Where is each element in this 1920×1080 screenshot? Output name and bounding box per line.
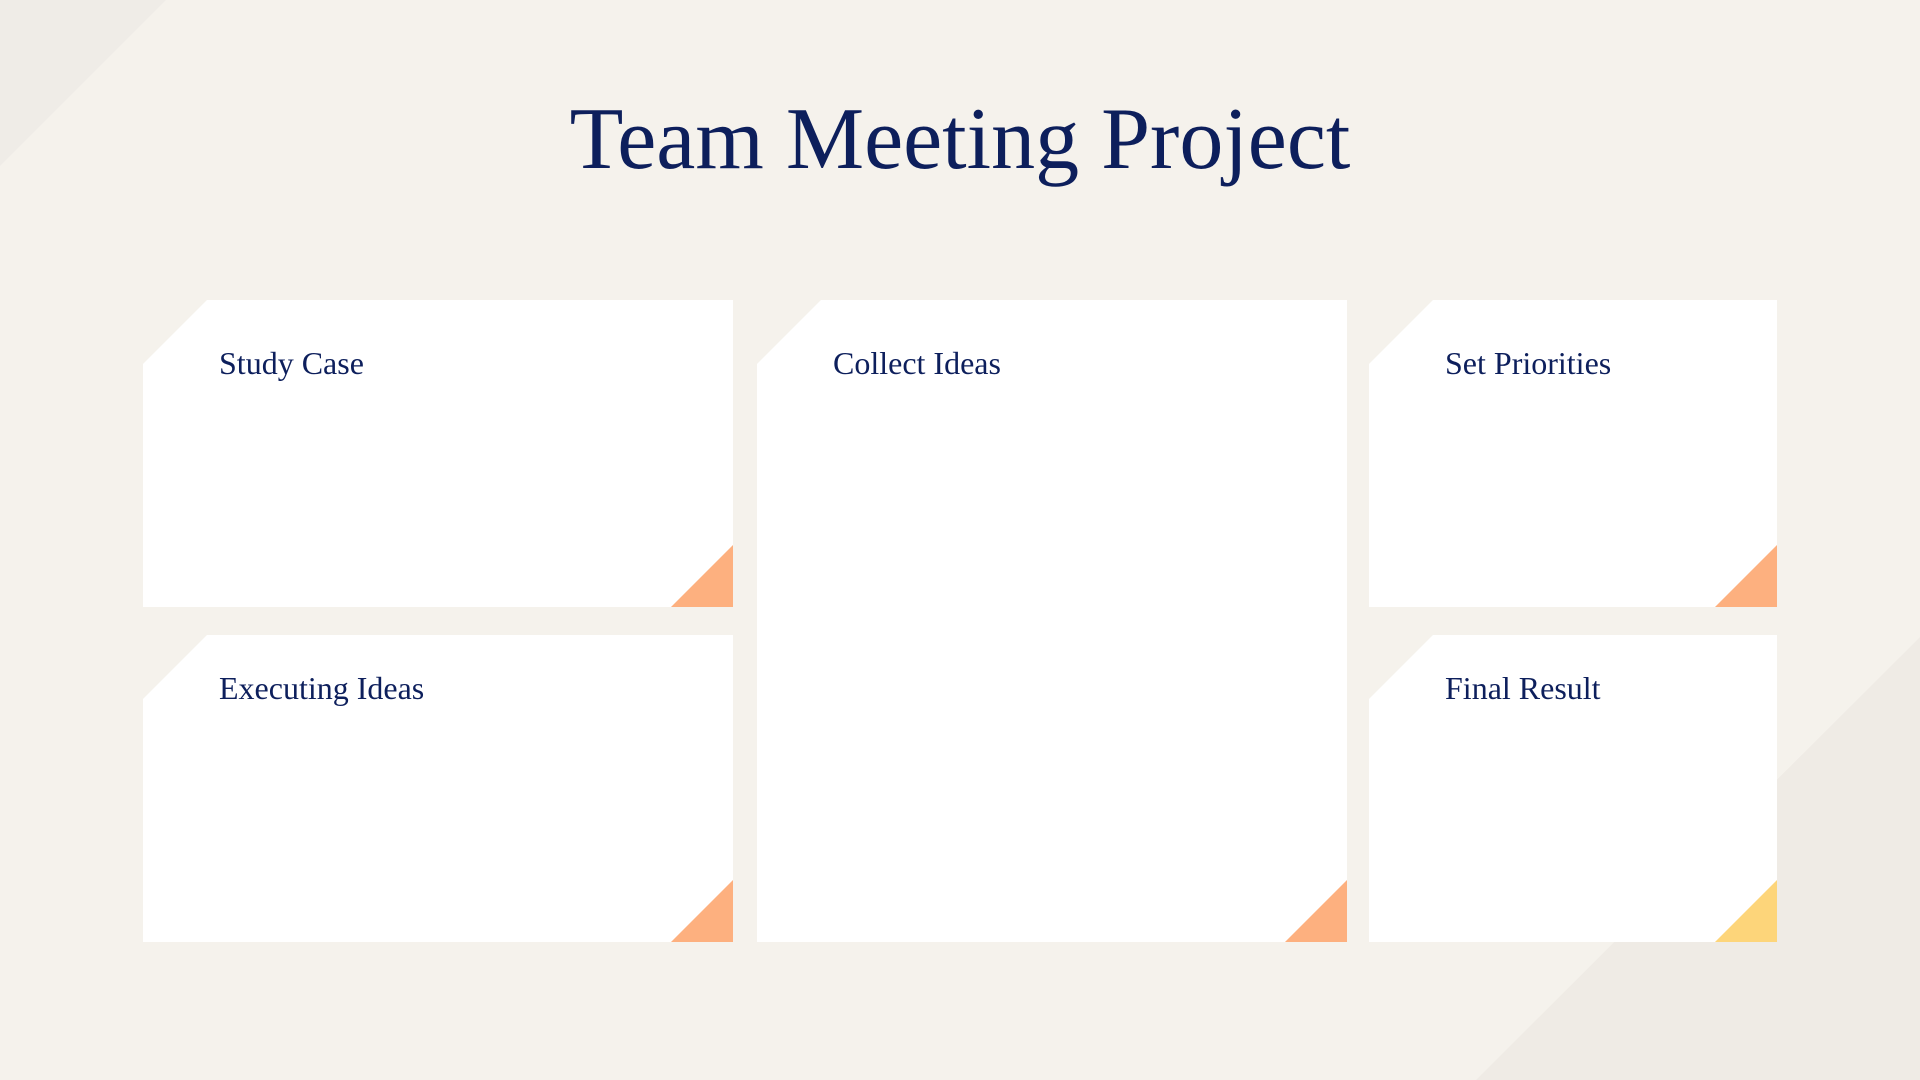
title: Team Meeting Project xyxy=(570,91,1350,188)
panel: study case xyxy=(143,300,733,607)
panel: final result: Final Result xyxy=(1445,670,1601,706)
panel: collect ideas: Collect Ideas xyxy=(833,345,1001,381)
panel: executing ideas xyxy=(143,635,733,942)
panel: collect ideas xyxy=(757,300,1347,942)
panel: set priorities xyxy=(1369,300,1777,607)
panel: executing ideas: Executing Ideas xyxy=(219,670,424,706)
panel: study case: Study Case xyxy=(219,345,364,381)
panel: final result xyxy=(1369,635,1777,942)
panel: set priorities: Set Priorities xyxy=(1445,345,1611,381)
